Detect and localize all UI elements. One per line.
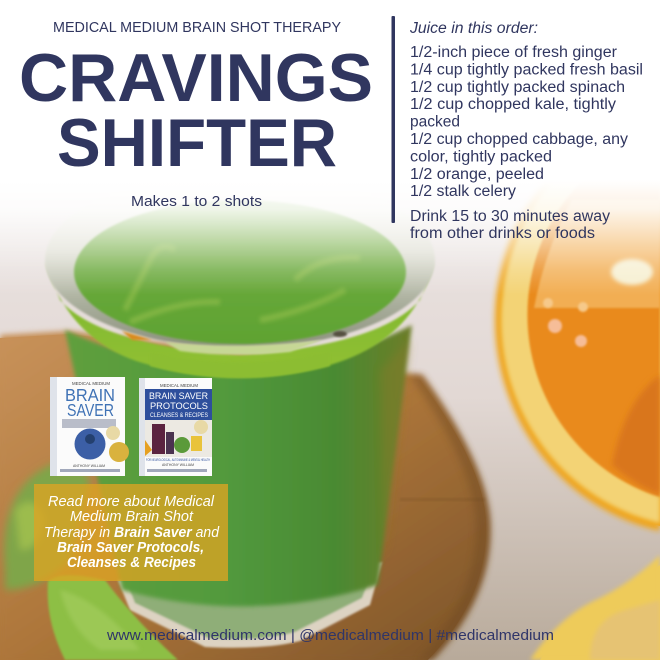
rim glass xyxy=(45,172,435,348)
book: Brain Saver Protocols xyxy=(139,378,212,476)
top kicker: MEDICAL MEDIUM BRAIN SHOT THERAPY xyxy=(53,20,341,36)
book: Brain Saver: MEDICAL MEDIUM xyxy=(72,381,110,386)
footer links: www.medicalmedium.com | @medicalmedium | #medicalmedium xyxy=(106,627,554,644)
book: Brain Saver Protocols: FOR NEUROLOGICAL, AUTOIMMUNE & MENTAL HEALTH xyxy=(146,457,210,462)
recipe text: packed xyxy=(410,114,460,130)
recipe text: 1/2 cup chopped kale, tightly xyxy=(410,96,616,113)
title: CRAVINGS xyxy=(19,40,373,116)
title xyxy=(19,40,373,181)
book: Brain Saver Protocols: BRAIN SAVER xyxy=(149,391,208,401)
callout: Cleanses & Recipes xyxy=(67,555,196,571)
recipe text: 1/2-inch piece of fresh ginger xyxy=(410,44,617,61)
recipe text: 1/2 cup tightly packed spinach xyxy=(410,79,625,96)
yield: Makes 1 to 2 shots xyxy=(131,194,262,210)
photo: foreground basil leaf xyxy=(48,575,178,660)
recipe text: 1/2 cup chopped cabbage, any xyxy=(410,131,628,148)
photo: upper basil leaf xyxy=(4,462,90,590)
rim band xyxy=(45,262,434,378)
recipe text xyxy=(409,20,643,242)
vertical divider xyxy=(392,16,395,223)
photo: orange slice xyxy=(495,109,660,531)
white fade at top of photo xyxy=(0,0,660,295)
book: Brain Saver Protocols: MEDICAL MEDIUM xyxy=(160,383,198,388)
orange rim reflection xyxy=(122,331,152,340)
photo: lemon piece xyxy=(530,555,660,660)
callout: Therapy in Brain Saver and xyxy=(44,525,220,541)
glass body xyxy=(65,325,412,606)
callout: Medium Brain Shot xyxy=(70,509,194,525)
book: Brain Saver Protocols: CLEANSES & RECIPES xyxy=(150,412,208,419)
callout: Read more about Medical xyxy=(48,494,215,510)
recipe text: Juice in this order: xyxy=(409,20,538,37)
book: Brain Saver: BRAIN xyxy=(65,385,115,405)
foam swirl xyxy=(125,247,360,322)
recipe text: 1/2 stalk celery xyxy=(410,183,516,200)
book: Brain Saver Protocols: PROTOCOLS xyxy=(150,401,208,411)
book: Brain Saver Protocols: ANTHONY WILLIAM xyxy=(162,463,194,467)
callout xyxy=(34,484,228,581)
glass base xyxy=(118,562,382,648)
photo: wooden board xyxy=(0,331,490,660)
recipe text: 1/2 orange, peeled xyxy=(410,166,544,183)
dark rim reflection xyxy=(333,331,347,337)
photo: glass of green juice xyxy=(45,172,435,648)
juice surface xyxy=(74,200,406,344)
recipe text: Drink 15 to 30 minutes away xyxy=(410,208,610,225)
recipe text: color, tightly packed xyxy=(410,148,552,166)
foam line at rim xyxy=(165,340,322,355)
title: SHIFTER xyxy=(57,105,337,181)
lower rim band over glass xyxy=(150,352,330,378)
book: Brain Saver: SAVER xyxy=(67,400,114,420)
recipe text: from other drinks or foods xyxy=(410,225,595,242)
book: Brain Saver: ANTHONY WILLIAM xyxy=(73,464,105,468)
book: Brain Saver xyxy=(50,377,129,476)
callout: Brain Saver Protocols, xyxy=(57,540,204,556)
recipe text: 1/4 cup tightly packed fresh basil xyxy=(410,62,643,78)
